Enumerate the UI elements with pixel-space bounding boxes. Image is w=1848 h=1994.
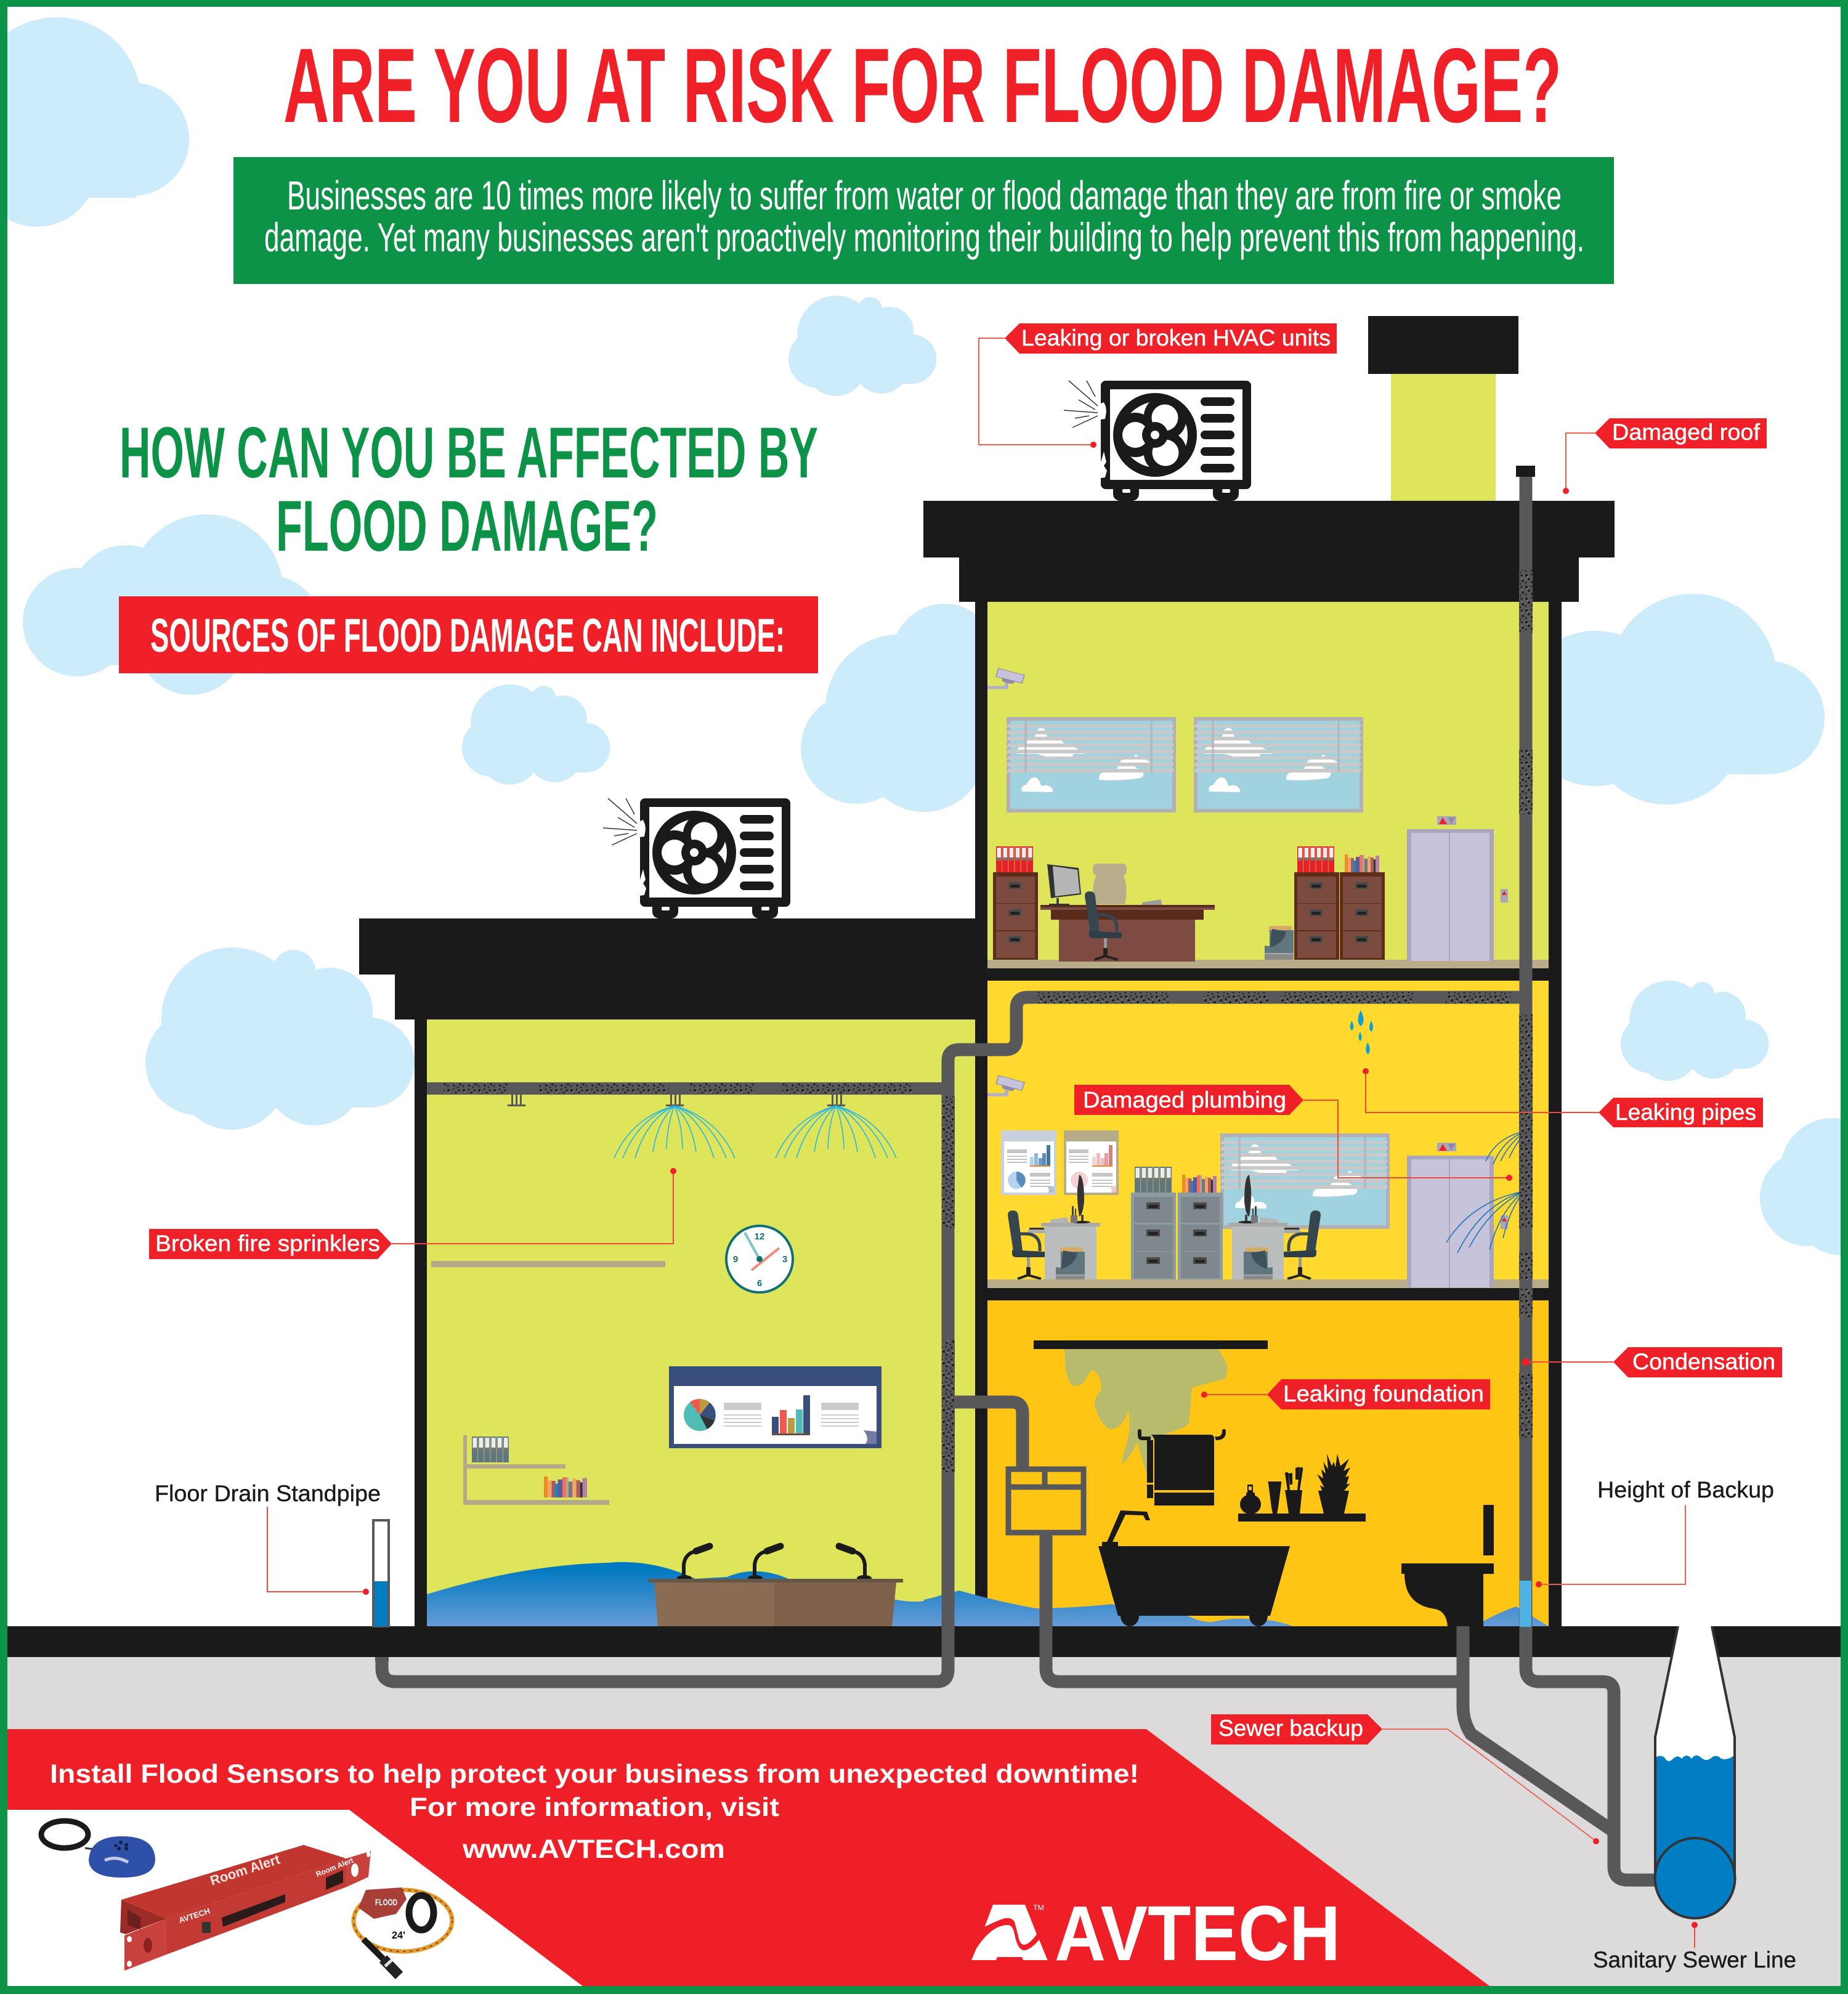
middle floor: poster 1 [1001, 1130, 1056, 1195]
middle floor: left desk and chair [1008, 1175, 1100, 1281]
cloud: small left [462, 684, 610, 785]
backup water in pipe [1520, 1581, 1531, 1627]
middle floor: water drops [1350, 1010, 1373, 1055]
HVAC unit on main roof [1064, 381, 1251, 501]
product: temperature sensor [41, 1821, 155, 1878]
main building: floors and walls [923, 501, 1615, 1626]
tag: broken fire sprinklers [149, 1168, 676, 1259]
top floor: printer [1265, 926, 1294, 960]
sanitary sewer line [1655, 1626, 1735, 1918]
cloud: beside heading [23, 514, 320, 695]
middle floor: elevator [987, 1143, 1549, 1288]
product: Room Alert device: Room Alert [208, 1851, 282, 1889]
tag: broken fire sprinklers: Broken fire sprinklers [155, 1231, 380, 1256]
tag: leaking pipes: Leaking pipes [1615, 1100, 1756, 1125]
product: Room Alert device: AVTECH [177, 1906, 211, 1925]
intro banner [233, 157, 1614, 284]
top floor: elevator [1407, 816, 1508, 961]
footer red banner [7, 1729, 1489, 1987]
tag: condensation [1522, 1347, 1782, 1377]
wing: wall clock: 6 [757, 1278, 762, 1289]
label: height of backup: Height of Backup [1597, 1477, 1774, 1502]
footer call to action text [50, 1759, 1139, 1864]
sources heading box: SOURCES OF FLOOD DAMAGE CAN INCLUDE: [150, 609, 785, 662]
wing: wall clock [726, 1226, 793, 1292]
label: floor drain standpipe [155, 1481, 381, 1595]
heading: how can you be affected: HOW CAN YOU BE AFFECTED BY [120, 412, 818, 493]
ground area [7, 1657, 1841, 1986]
top floor: window 2 [1194, 719, 1361, 811]
chimney [1368, 316, 1518, 502]
wing: tan bar [431, 1261, 665, 1267]
product: flood sensor with rope [354, 1887, 452, 1976]
cloud: small right [1621, 981, 1769, 1081]
cloud: behind upper floor left [801, 604, 997, 812]
tag: condensation: Condensation [1632, 1349, 1775, 1374]
wing: shelves with folders and books [463, 1435, 609, 1505]
sprinkler 1 with spray [614, 1095, 735, 1158]
basement: towel [1138, 1429, 1226, 1506]
tag: leaking pipes [1363, 1068, 1763, 1127]
basement: toilet [1401, 1505, 1494, 1626]
middle floor: camera [987, 1076, 1024, 1096]
top floor: right cabinets and books [1294, 846, 1385, 960]
ground slab [7, 1626, 1841, 1657]
middle floor: poster 2 [1064, 1130, 1119, 1195]
tag: HVAC units: Leaking or broken HVAC units [1021, 325, 1331, 351]
product: flood sensor with rope: FLOOD [375, 1897, 397, 1908]
product: Room Alert device: Room Alert [315, 1856, 355, 1879]
label: sanitary sewer line: Sanitary Sewer Line [1593, 1947, 1796, 1972]
label: floor drain standpipe: Floor Drain Standpipe [155, 1481, 381, 1506]
plumbing pipes [382, 476, 1663, 1880]
top floor: desk [1040, 864, 1215, 962]
heading: how can you be affected: FLOOD DAMAGE? [276, 485, 658, 566]
AVTECH logo: AVTECH [1055, 1890, 1340, 1977]
AVTECH logo: TM [1033, 1903, 1044, 1912]
cloud: under banner [788, 296, 936, 396]
middle floor: grey cabinets [1131, 1167, 1223, 1281]
label: sanitary sewer line [1593, 1922, 1796, 1972]
wing: wall clock: 3 [782, 1254, 787, 1265]
wing: wall poster with charts [669, 1366, 881, 1448]
tag: damaged roof: Damaged roof [1612, 419, 1761, 445]
cloud: right edge [1760, 1118, 1848, 1255]
basement: shelf and water stain [1034, 1340, 1268, 1475]
middle floor: window [1220, 1135, 1388, 1227]
floor drain standpipe gauge [373, 1520, 389, 1662]
footer call to action text: Install Flood Sensors to help protect your business from unexpected downtime! [50, 1759, 1139, 1789]
tag: damaged plumbing: Damaged plumbing [1083, 1087, 1286, 1113]
tag: leaking foundation [1201, 1379, 1490, 1409]
middle floor: right desk and chair [1228, 1175, 1321, 1281]
wing: podium with microphones [648, 1546, 903, 1626]
tag: HVAC units [979, 323, 1337, 448]
HVAC unit on wing roof [603, 798, 790, 918]
top floor: camera [987, 668, 1024, 689]
tag: damaged roof [1563, 418, 1767, 494]
wing: wall clock: 9 [733, 1254, 738, 1265]
top floor: window 1 [1007, 719, 1174, 811]
label: height of backup [1536, 1477, 1774, 1587]
basement: junction box [1008, 1469, 1084, 1533]
tag: damaged plumbing [1074, 1085, 1512, 1181]
standpipe vent cap [1516, 466, 1535, 477]
flood water: wing and basement [427, 1562, 1549, 1626]
footer call to action text: For more information, visit [410, 1793, 779, 1822]
sprinkler head idle [508, 1095, 525, 1106]
top floor: left cabinet [993, 846, 1038, 960]
tag: sewer backup [1211, 1714, 1599, 1844]
cloud: behind upper floor right [1518, 594, 1825, 804]
pipe corrosion texture [444, 570, 1533, 1472]
sources heading box [119, 596, 818, 673]
cloud: wing left [145, 947, 415, 1130]
basement: bath shelf items [1238, 1454, 1366, 1522]
wing: wall clock: 12 [755, 1231, 764, 1242]
basement: bathtub [1098, 1510, 1290, 1626]
product: Room Alert device [120, 1845, 371, 1971]
heading: how can you be affected [120, 412, 818, 566]
footer call to action text: www.AVTECH.com [462, 1834, 725, 1864]
sprinkler 2 with spray [776, 1095, 896, 1158]
tag: leaking foundation: Leaking foundation [1283, 1381, 1484, 1406]
tag: sewer backup: Sewer backup [1218, 1716, 1363, 1741]
product: flood sensor with rope: 24' [392, 1929, 405, 1941]
cloud: top left [0, 17, 189, 227]
middle floor: pipe sprays [1446, 1131, 1526, 1253]
left wing building [359, 918, 987, 1626]
